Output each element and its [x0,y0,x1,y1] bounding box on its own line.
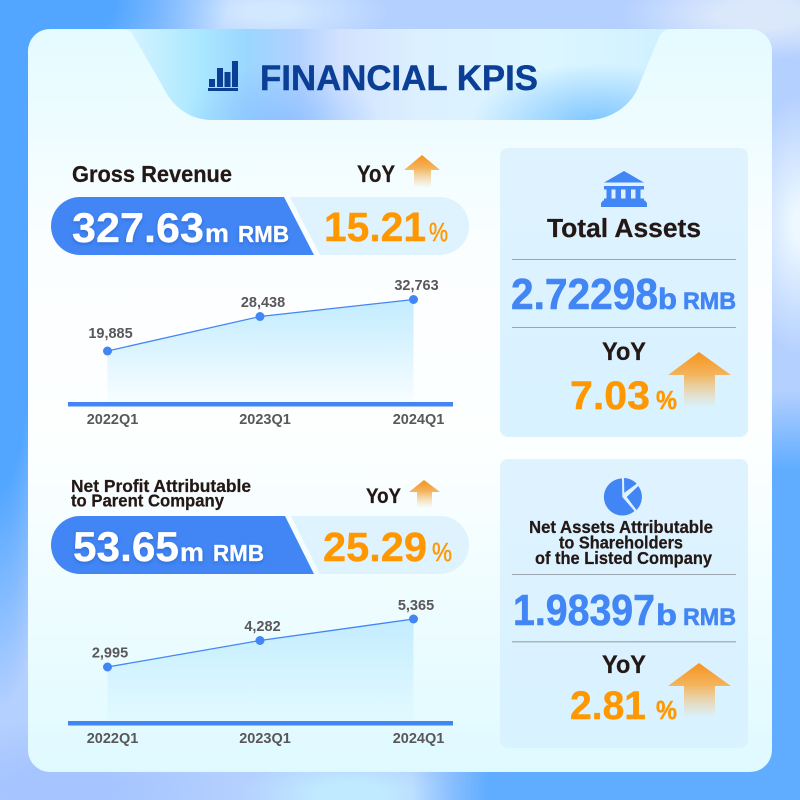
chart: net profit: 2023Q1 [239,731,291,747]
chart: net profit: 2024Q1 [393,731,444,747]
panel: net profit [51,476,469,574]
icon: up arrow [404,155,440,188]
heading: net profit: to Parent Company [71,490,224,510]
heading: net profit: Net Profit Attributable [71,476,251,496]
chart: gross revenue: 32,763 [394,278,439,294]
heading: net assets: of the Listed Company [535,548,712,568]
value: net assets: b [656,599,677,632]
icon: bar chart [208,61,238,91]
panel: gross revenue [51,155,469,255]
chart: gross revenue: 19,885 [88,326,133,342]
label: YoY: YoY [357,161,395,188]
label: YoY: YoY [602,338,646,366]
title: FINANCIAL KPIS [260,59,538,98]
chart: net profit: 5,365 [398,598,434,614]
label: YoY: YoY [366,485,401,508]
chart: gross revenue: 28,438 [241,295,285,311]
pill: right part [290,197,469,255]
panel: net assets [500,459,748,748]
label: YoY: YoY [602,651,646,679]
chart: gross revenue: 2023Q1 [239,412,291,428]
heading: total assets: Total Assets [547,215,701,243]
icon: up arrow [668,352,731,408]
header tab [122,29,672,120]
value: revenue growth: 15.21 [324,204,426,250]
icon: bank [601,171,647,207]
icon: up arrow [668,663,731,718]
value: total assets: b [658,283,677,316]
icon: up arrow [409,480,440,508]
value: revenue [72,204,289,251]
value: net profit: RMB [213,540,264,566]
value: revenue: m [205,218,229,248]
chart: net profit: 2,995 [92,646,128,662]
value: total assets growth: 7.03 [570,374,650,418]
value: total assets: 2.72298 [511,270,658,319]
value: net assets growth: 2.81 [570,684,646,728]
value: net profit: m [180,537,204,567]
panel: total assets [500,148,748,437]
value: revenue: 327.63 [72,204,204,251]
chart: net profit [68,598,453,747]
value: net profit growth: % [432,537,452,567]
value: revenue: RMB [238,221,289,247]
heading: net assets: Net Assets Attributable [529,517,713,537]
heading: net assets: to Shareholders [559,532,683,552]
value: net profit [73,523,264,570]
value: net assets: 1.98397 [513,586,655,635]
chart: gross revenue: 2024Q1 [393,412,444,428]
value: net assets: RMB [683,604,736,631]
chart: gross revenue: 2022Q1 [87,412,138,428]
chart: gross revenue [68,278,453,428]
chart: net profit: 2022Q1 [87,731,138,747]
pill: left part [51,516,314,574]
value: net assets growth: % [656,695,677,725]
pill: left part [51,197,314,255]
value: revenue growth: % [429,217,448,247]
pill: right part [291,516,469,574]
value: net profit growth: 25.29 [323,524,427,570]
value: total assets: RMB [683,288,736,315]
chart: net profit: 4,282 [244,619,281,635]
heading: gross revenue: Gross Revenue [72,161,232,187]
icon: pie chart [604,478,642,515]
value: total assets growth: % [656,385,677,415]
value: net profit: 53.65 [73,523,179,570]
